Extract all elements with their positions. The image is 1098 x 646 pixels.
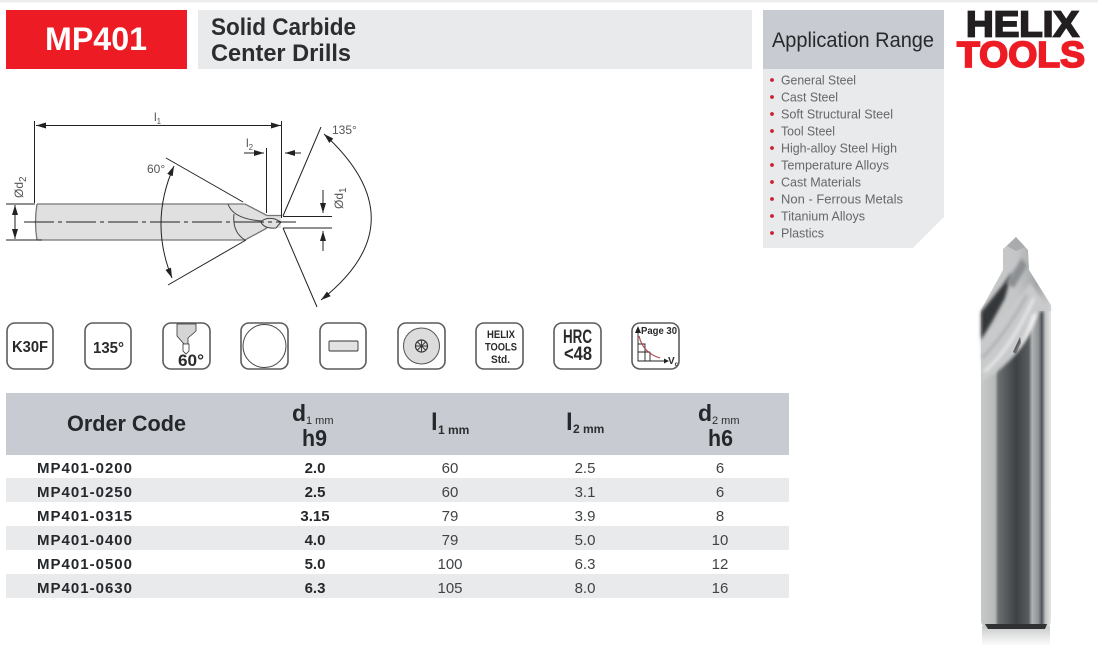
row MP401-0315: MP401-0315 — [37, 508, 132, 525]
row MP401-0500: 5.0 — [305, 556, 325, 573]
dimension l1: l — [154, 110, 157, 124]
table header: h6 — [708, 425, 733, 451]
table header: Order Code — [67, 411, 186, 436]
row MP401-0400: 4.0 — [305, 532, 325, 549]
dimension l2: l — [246, 136, 249, 150]
dimension d2: Ød — [12, 182, 26, 198]
icon: cutting speed chart — [632, 323, 679, 369]
icon: HRC below 48: HRC — [563, 327, 592, 348]
row MP401-0315: 8 — [716, 508, 724, 525]
dimension l1: 1 — [157, 117, 162, 126]
angle 60 — [147, 158, 246, 285]
angle 60: 60° — [147, 162, 165, 176]
row MP401-0630: MP401-0630 — [37, 580, 132, 597]
row MP401-0250: 3.1 — [575, 484, 595, 501]
icon: round shank — [241, 323, 288, 369]
row MP401-0250: 2.5 — [305, 484, 325, 501]
row MP401-0400: 10 — [712, 532, 728, 549]
row MP401-0500: MP401-0500 — [37, 556, 132, 573]
icon: cutting speed chart: c — [675, 362, 679, 368]
shank — [981, 310, 1051, 628]
title banner: Solid Carbide — [211, 14, 356, 41]
icon: HRC below 48: <48 — [564, 344, 592, 365]
row MP401-0200: 2.5 — [575, 460, 595, 477]
row MP401-0200: 60 — [442, 460, 458, 477]
row MP401-0200 — [37, 460, 724, 477]
row MP401-0500 — [37, 556, 728, 573]
row MP401-0500: 100 — [437, 556, 463, 573]
application list: Tool Steel — [781, 124, 835, 138]
icon: helix tools standard — [476, 323, 523, 369]
row MP401-0630: 16 — [712, 580, 728, 597]
row stripes — [6, 478, 789, 598]
application list: General Steel — [781, 72, 856, 88]
icon: K30F — [7, 323, 53, 369]
angle 135 — [283, 123, 371, 307]
drill body — [36, 204, 281, 240]
dimension l2: 2 — [249, 143, 254, 152]
row MP401-0250 — [37, 484, 724, 501]
icon: 60 degree: 60° — [178, 351, 204, 370]
row MP401-0500: 12 — [712, 556, 728, 573]
icon: helix tools standard: TOOLS — [485, 342, 517, 354]
icon: helix tools standard: HELIX — [487, 329, 516, 341]
table header: l — [431, 409, 438, 436]
application list: Plastics — [781, 226, 824, 240]
row MP401-0315: 3.15 — [300, 508, 330, 525]
dimension l2 — [244, 136, 301, 213]
row MP401-0630 — [37, 580, 728, 597]
application list — [770, 72, 903, 240]
row MP401-0250: 60 — [442, 484, 458, 501]
title banner — [198, 10, 752, 69]
dimension d1: 1 — [338, 187, 349, 193]
application list: Cast Materials — [781, 174, 861, 190]
product code badge: MP401 — [45, 21, 147, 57]
table header: 2 mm — [712, 415, 740, 427]
dimension d2 — [6, 176, 42, 240]
drill photo — [981, 237, 1051, 646]
icon: HRC below 48 — [554, 323, 601, 369]
table header: h9 — [302, 425, 327, 451]
row MP401-0630: 6.3 — [305, 580, 325, 597]
neck and tip — [981, 237, 1051, 382]
product code badge — [6, 10, 187, 69]
row MP401-0630: 8.0 — [575, 580, 595, 597]
row MP401-0400: 5.0 — [575, 532, 595, 549]
table header: 1 mm — [306, 415, 334, 427]
row MP401-0500: 6.3 — [575, 556, 595, 573]
logo: helix tools: TOOLS — [957, 34, 1085, 75]
reflection — [982, 626, 1050, 646]
row MP401-0315: 79 — [442, 508, 458, 525]
row MP401-0250: 6 — [716, 484, 724, 501]
dimension d1: Ød — [332, 193, 346, 209]
tip facet — [1007, 237, 1025, 251]
table header: l — [566, 409, 573, 436]
icon: shank side view — [320, 323, 366, 369]
logo: helix tools: HELIX — [966, 4, 1079, 44]
logo: helix tools — [957, 4, 1085, 75]
title banner: Center Drills — [211, 40, 351, 67]
application list: Titanium Alloys — [781, 208, 865, 224]
application list: High-alloy Steel High — [781, 140, 897, 156]
technical drawing — [6, 110, 371, 307]
icon: cutting speed chart: Page 30 — [641, 326, 677, 337]
specification table — [6, 393, 789, 598]
application list: Soft Structural Steel — [781, 106, 893, 122]
row MP401-0315 — [37, 508, 724, 525]
panel: application range — [763, 10, 944, 248]
icon: K30F: K30F — [12, 339, 48, 356]
table header: d — [292, 400, 306, 426]
icon: cutting speed chart: V — [668, 356, 675, 367]
row MP401-0400: MP401-0400 — [37, 532, 132, 549]
application list: Cast Steel — [781, 90, 838, 104]
row MP401-0630: 105 — [437, 580, 463, 597]
dark flute — [981, 272, 1012, 340]
row MP401-0250: MP401-0250 — [37, 484, 132, 501]
icon: 60 degree — [163, 323, 210, 370]
row MP401-0200: 6 — [716, 460, 724, 477]
icon: 135 degree — [85, 323, 131, 369]
icon: helix tools standard: Std. — [491, 354, 510, 366]
table header — [6, 393, 789, 455]
table header: 1 mm — [438, 423, 469, 437]
dimension d2: 2 — [18, 176, 29, 182]
dimension d1 — [283, 187, 349, 251]
heading: application range: Application Range — [772, 29, 934, 52]
dimension l1 — [34, 110, 282, 218]
table header: d — [698, 400, 712, 426]
application list: Temperature Alloys — [781, 158, 889, 172]
icon row — [7, 323, 679, 370]
row MP401-0315: 3.9 — [575, 508, 595, 525]
icon: 135 degree: 135° — [93, 340, 124, 357]
application list: Non - Ferrous Metals — [781, 192, 903, 206]
angle 135: 135° — [332, 123, 357, 137]
row MP401-0200: 2.0 — [305, 460, 325, 477]
row MP401-0400 — [37, 532, 728, 549]
row MP401-0200: MP401-0200 — [37, 460, 132, 477]
icon: end view — [398, 323, 445, 369]
light swept flute band — [981, 283, 1051, 380]
row MP401-0400: 79 — [442, 532, 458, 549]
table header: 2 mm — [573, 422, 604, 436]
